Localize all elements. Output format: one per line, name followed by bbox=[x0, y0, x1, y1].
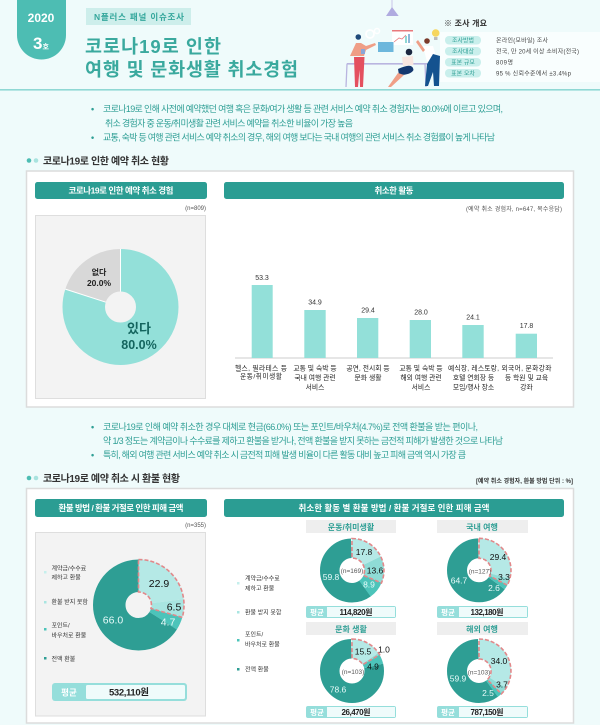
group: culture: 78.6 bbox=[330, 684, 347, 694]
survey row: sample: 표본 규모 bbox=[451, 60, 475, 66]
unit note: [예약 취소 경험자, 환불 방법 단위 : %] bbox=[476, 477, 573, 485]
legend: refund method: 환불 받지 못함 bbox=[52, 598, 88, 606]
legend: refund method: 포인트/ bbox=[52, 622, 70, 630]
legend: refund method bbox=[44, 564, 88, 663]
panel: refund status bbox=[26, 488, 574, 723]
group: domestic travel bbox=[437, 520, 528, 618]
sample size: (n=809) bbox=[185, 206, 206, 212]
legend: activity refund method: 제하고 환불 bbox=[245, 584, 275, 592]
survey row: method: 온라인(모바일) 조사 bbox=[496, 36, 548, 44]
illustration: office team bbox=[346, 0, 440, 87]
bar chart: cancelled activities: 24.1 bbox=[466, 314, 480, 322]
group: overseas travel: 2.5 bbox=[482, 688, 494, 698]
bar chart: cancelled activities: 해외 여행 관련 bbox=[400, 373, 442, 382]
intro bullets: • bbox=[91, 132, 94, 142]
group: sports and hobbies: 17.8 bbox=[356, 547, 373, 557]
heading: refund by activity bbox=[224, 499, 564, 517]
bar chart: cancelled activities: 34.9 bbox=[308, 300, 322, 306]
heading: cancellation experience: 코로나19로 인한 예약 취소 경험 bbox=[68, 186, 174, 196]
bar chart: cancelled activities: 헬스, 필라테스 등 bbox=[235, 364, 287, 372]
group: domestic travel: 64.7 bbox=[451, 576, 468, 586]
group: domestic travel: 132,180원 bbox=[470, 607, 504, 617]
survey row: error: 표본 오차 bbox=[451, 70, 475, 78]
group: domestic travel: 29.4 bbox=[490, 552, 507, 562]
heading: cancelled activities bbox=[224, 182, 564, 199]
chart: overall refund donut: 22.9 bbox=[149, 578, 169, 590]
title: 코로나19로 인한 bbox=[85, 36, 221, 57]
group: culture: 문화 생활 bbox=[335, 624, 367, 634]
legend: refund method: 전액 환불 bbox=[52, 655, 76, 663]
heading: cancellation experience bbox=[35, 182, 207, 199]
average: overall bbox=[52, 683, 187, 701]
bar chart: cancelled activities: 28.0 bbox=[414, 310, 428, 316]
refund bullets bbox=[91, 421, 503, 460]
series tag bbox=[86, 8, 191, 25]
bar chart: cancelled activities bbox=[235, 275, 553, 392]
group: sports and hobbies: 59.8 bbox=[323, 572, 340, 582]
chart: overall refund donut bbox=[36, 532, 206, 716]
intro bullets bbox=[91, 103, 503, 142]
bar chart: cancelled activities: 운동/취미생활 bbox=[240, 372, 282, 380]
chart: cancellation donut: 없다 bbox=[92, 267, 107, 277]
bar chart: cancelled activities: 53.3 bbox=[255, 275, 269, 282]
intro bullets: 교통, 숙박 등 여행 관련 서비스 예약 취소의 경우, 해외 여행 보다는 국내 여행의 관련 서비스 취소 경험률이 높게 나타남 bbox=[103, 132, 495, 142]
intro bullets: • bbox=[91, 104, 94, 114]
intro bullets: 취소 경험자 중 운동/취미생활 관련 서비스 예약을 취소한 비율이 가장 높음 bbox=[105, 118, 353, 128]
group: overseas travel bbox=[437, 622, 528, 718]
group: culture: 1.0 bbox=[378, 644, 390, 654]
legend: activity refund method: 환불 받지 못함 bbox=[245, 608, 282, 616]
group: overseas travel: 787,150원 bbox=[470, 707, 504, 717]
heading: refund method and damage bbox=[35, 499, 207, 517]
heading: refund by activity: 취소한 활동 별 환불 방법 / 환불 거절로 인한 피해 금액 bbox=[298, 503, 490, 513]
survey overview: ※ 조사 개요 bbox=[444, 18, 488, 28]
group: overseas travel: 34.0 bbox=[491, 656, 508, 666]
refund bullets: 특히, 해외 여행 관련 서비스 예약 취소 시 금전적 피해 발생 비율이 다른 활동 대비 높고 피해 금액 역시 가장 큼 bbox=[103, 449, 466, 460]
bar chart: cancelled activities: 교통 및 숙박 등 bbox=[399, 364, 443, 372]
bar chart: cancelled activities: 17.8 bbox=[520, 323, 533, 330]
average: overall: 평균 bbox=[61, 688, 77, 698]
legend: activity refund method: 포인트/ bbox=[245, 632, 264, 638]
issue badge bbox=[17, 0, 66, 59]
chart: overall refund donut: 4.7 bbox=[161, 616, 175, 628]
survey row: error bbox=[445, 69, 572, 78]
group: domestic travel: (n=127) bbox=[469, 568, 491, 576]
title: 여행 및 문화생활 취소경험 bbox=[85, 59, 298, 80]
bar chart: cancelled activities: 모임/행사 장소 bbox=[453, 382, 494, 392]
average: overall: 532,110원 bbox=[109, 686, 149, 698]
bar chart: cancelled activities: 문화 생활 bbox=[355, 373, 381, 382]
chart: overall refund donut: 66.0 bbox=[103, 614, 123, 626]
group: culture: 26,470원 bbox=[342, 707, 370, 717]
chart: cancellation donut: 80.0% bbox=[121, 338, 157, 352]
issue badge: 3호 bbox=[33, 34, 50, 53]
group: overseas travel: 59.9 bbox=[450, 674, 467, 684]
legend: activity refund method bbox=[237, 574, 282, 674]
legend: refund method: 바우처로 환불 bbox=[52, 632, 87, 640]
bar chart: cancelled activities: 예식장, 레스토랑, bbox=[448, 364, 499, 372]
refund bullets: 코로나19로 인해 예약 취소한 경우 대체로 현금(66.0%) 또는 포인트/바우처(4.7%)로 전액 환불을 받는 편이나, bbox=[103, 421, 478, 432]
survey row: target: 조사대상 bbox=[452, 48, 475, 56]
survey overview bbox=[440, 18, 600, 82]
survey row: sample: 809명 bbox=[496, 58, 513, 66]
chart: overall refund donut: 6.5 bbox=[167, 602, 181, 614]
section heading: reservation cancellation: 코로나19로 인한 예약 취소 현황 bbox=[43, 154, 169, 168]
refund bullets: 약 1/3 정도는 계약금이나 수수료를 제하고 환불을 받거나, 전액 환불을 받지 못하는 금전적 피해가 발생한 것으로 나타남 bbox=[103, 435, 503, 446]
survey row: method: 조사방법 bbox=[452, 36, 474, 44]
bar chart: cancelled activities: 호텔 연회장 등 bbox=[453, 373, 494, 382]
group: sports and hobbies bbox=[306, 520, 396, 618]
sample size: (n=355) bbox=[185, 523, 206, 529]
bar chart: cancelled activities: 국내 여행 관련 bbox=[294, 373, 336, 382]
group: culture bbox=[306, 622, 396, 718]
legend: refund method: 계약금/수수료 bbox=[52, 564, 87, 572]
group: sports and hobbies: 평균 bbox=[310, 607, 324, 617]
title bbox=[85, 36, 298, 80]
group: domestic travel: 국내 여행 bbox=[466, 522, 498, 532]
group: overseas travel: (n=103) bbox=[468, 669, 490, 676]
group: overseas travel: 3.7 bbox=[496, 680, 508, 690]
intro bullets: 코로나19로 인해 사전에 예약했던 여행 혹은 문화/여가 생활 등 관련 서비스 예약 취소 경험자는 80.0%에 이르고 있으며, bbox=[103, 103, 503, 114]
chart: cancellation donut bbox=[36, 216, 206, 398]
series tag: N플러스 패널 이슈조사 bbox=[94, 12, 184, 22]
refund bullets: • bbox=[91, 450, 94, 460]
legend: activity refund method: 바우처로 환불 bbox=[245, 640, 280, 648]
bar chart: cancelled activities: 공연, 전시회 등 bbox=[346, 364, 390, 372]
survey row: method bbox=[445, 36, 548, 44]
group: culture: (n=103) bbox=[342, 669, 364, 676]
bar chart: cancelled activities: 서비스 bbox=[412, 382, 430, 392]
base note: (예약 취소 경험자, n=647, 복수응답) bbox=[466, 205, 562, 213]
group: culture: 평균 bbox=[310, 707, 324, 717]
group: culture: 15.5 bbox=[355, 646, 372, 656]
group: sports and hobbies: 114,820원 bbox=[340, 607, 372, 617]
bar chart: cancelled activities: 강좌 bbox=[520, 382, 533, 392]
group: sports and hobbies: (n=169) bbox=[341, 568, 363, 575]
heading: refund method and damage: 환불 방법 / 환불 거절로 인한 피해 금액 bbox=[58, 503, 184, 513]
heading: cancelled activities: 취소한 활동 bbox=[374, 186, 414, 196]
issue badge: 2020 bbox=[28, 11, 55, 25]
group: culture: 4.9 bbox=[367, 662, 379, 672]
legend: activity refund method: 계약금/수수료 bbox=[245, 574, 280, 582]
legend: refund method: 제하고 환불 bbox=[52, 574, 81, 582]
survey row: sample bbox=[445, 58, 513, 66]
bar chart: cancelled activities: 교통 및 숙박 등 bbox=[293, 364, 337, 372]
group: domestic travel: 평균 bbox=[441, 607, 455, 617]
chart: cancellation donut: 20.0% bbox=[87, 278, 111, 288]
panel: reservation cancellation bbox=[26, 171, 574, 407]
bar chart: cancelled activities: 등 학원 및 교육 bbox=[505, 373, 548, 382]
group: sports and hobbies: 8.9 bbox=[363, 580, 375, 590]
survey row: target: 전국, 만 20세 이상 소비자(전국) bbox=[496, 48, 579, 56]
refund bullets: • bbox=[91, 422, 94, 432]
survey row: target bbox=[445, 47, 579, 56]
chart: cancellation donut: 있다 bbox=[127, 321, 151, 336]
group: domestic travel: 3.3 bbox=[498, 572, 510, 582]
bar chart: cancelled activities: 서비스 bbox=[306, 382, 324, 392]
bar chart: cancelled activities: 외국어, 문화강좌 bbox=[502, 364, 552, 372]
group: sports and hobbies: 13.6 bbox=[367, 566, 384, 576]
legend: activity refund method: 전액 환불 bbox=[245, 666, 269, 674]
group: overseas travel: 해외 여행 bbox=[466, 624, 498, 634]
group: overseas travel: 평균 bbox=[441, 707, 455, 717]
group: sports and hobbies: 운동/취미생활 bbox=[328, 522, 375, 532]
group: domestic travel: 2.6 bbox=[488, 583, 500, 593]
bar chart: cancelled activities: 29.4 bbox=[361, 308, 375, 314]
survey row: error: 95 % 신뢰수준에서 ±3.4%p bbox=[496, 70, 572, 78]
section heading: refund status: 코로나19로 예약 취소 시 환불 현황 bbox=[43, 472, 180, 485]
